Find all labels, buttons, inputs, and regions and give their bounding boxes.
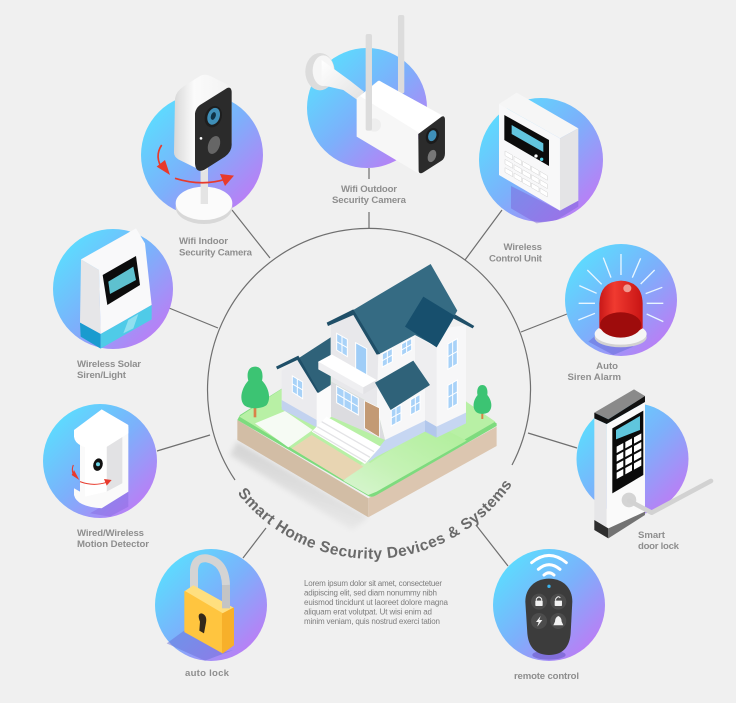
body text: minim veniam, quis nostrud exerci tation xyxy=(304,617,440,626)
label: Siren/Light xyxy=(77,370,127,381)
disc xyxy=(307,48,427,168)
body text: euismod tincidunt ut laoreet dolore magna xyxy=(304,598,449,607)
label: Motion Detector xyxy=(77,539,149,550)
icon: padlock xyxy=(167,558,233,661)
disc xyxy=(576,403,688,515)
icon: remote xyxy=(525,555,572,660)
label xyxy=(77,359,141,381)
label: Control Unit xyxy=(489,254,543,264)
panel: motion detector xyxy=(43,404,157,550)
garage wing xyxy=(276,337,332,427)
label xyxy=(77,528,149,550)
label: Wifi Indoor xyxy=(179,236,228,247)
icon: door lock xyxy=(594,389,711,538)
windows xyxy=(337,333,457,426)
icon: indoor camera xyxy=(157,75,234,224)
disc xyxy=(565,244,677,356)
hub ring xyxy=(208,228,531,480)
label: Security Camera xyxy=(179,248,253,258)
label: Smart xyxy=(638,530,666,541)
right tree xyxy=(474,385,491,419)
lawn xyxy=(237,333,497,497)
panel: wifi outdoor camera xyxy=(305,15,445,206)
icon: solar siren xyxy=(80,228,152,349)
label xyxy=(179,236,253,258)
disc xyxy=(53,229,173,349)
panel: wireless solar siren xyxy=(53,228,173,381)
connector lines xyxy=(157,168,577,566)
panel: smart door lock xyxy=(576,389,711,552)
label: Wired/Wireless xyxy=(77,528,144,539)
disc xyxy=(155,549,267,661)
panel: auto lock xyxy=(155,549,267,679)
left tree xyxy=(241,367,269,417)
label: Auto xyxy=(596,361,618,372)
panel: auto siren alarm xyxy=(565,244,677,383)
disc xyxy=(43,404,157,518)
disc xyxy=(141,94,263,216)
icon: outdoor camera xyxy=(305,15,445,173)
label xyxy=(489,242,543,264)
body text: Lorem ipsum dolor sit amet, consectetuer xyxy=(304,579,442,588)
label: Wireless Solar xyxy=(77,359,141,370)
icon: control unit xyxy=(499,93,578,223)
label: Wireless xyxy=(504,242,542,253)
icon: motion detector xyxy=(72,409,128,517)
panel: wireless control unit xyxy=(479,93,603,264)
label xyxy=(638,530,680,552)
body text: aliquam erat volutpat. Ut wisi enim ad xyxy=(304,608,432,616)
soil block xyxy=(237,420,497,517)
balcony xyxy=(318,354,377,394)
label: Wifi Outdoor xyxy=(341,184,397,195)
main house walls xyxy=(331,313,466,463)
body text: adipiscing elit, sed diam nonummy nibh xyxy=(304,588,437,598)
body text xyxy=(304,579,449,626)
ground shadow xyxy=(230,442,368,530)
main roof xyxy=(327,264,474,355)
disc xyxy=(493,549,605,661)
label: Siren Alarm xyxy=(568,372,621,383)
label: door lock xyxy=(638,541,680,552)
panel: remote control xyxy=(493,549,605,682)
label xyxy=(332,184,407,206)
disc xyxy=(479,98,603,222)
panel: wifi indoor camera xyxy=(141,75,263,258)
entrance steps xyxy=(312,417,381,464)
porch roof xyxy=(375,361,430,410)
label: remote control xyxy=(514,671,579,682)
label xyxy=(568,361,621,383)
label: auto lock xyxy=(185,668,230,679)
title on curve: Smart Home Security Devices & Systems xyxy=(238,481,511,562)
icon: siren xyxy=(578,254,663,355)
label: Security Camera xyxy=(332,195,407,206)
central house illustration xyxy=(230,264,497,530)
front door xyxy=(365,401,379,437)
